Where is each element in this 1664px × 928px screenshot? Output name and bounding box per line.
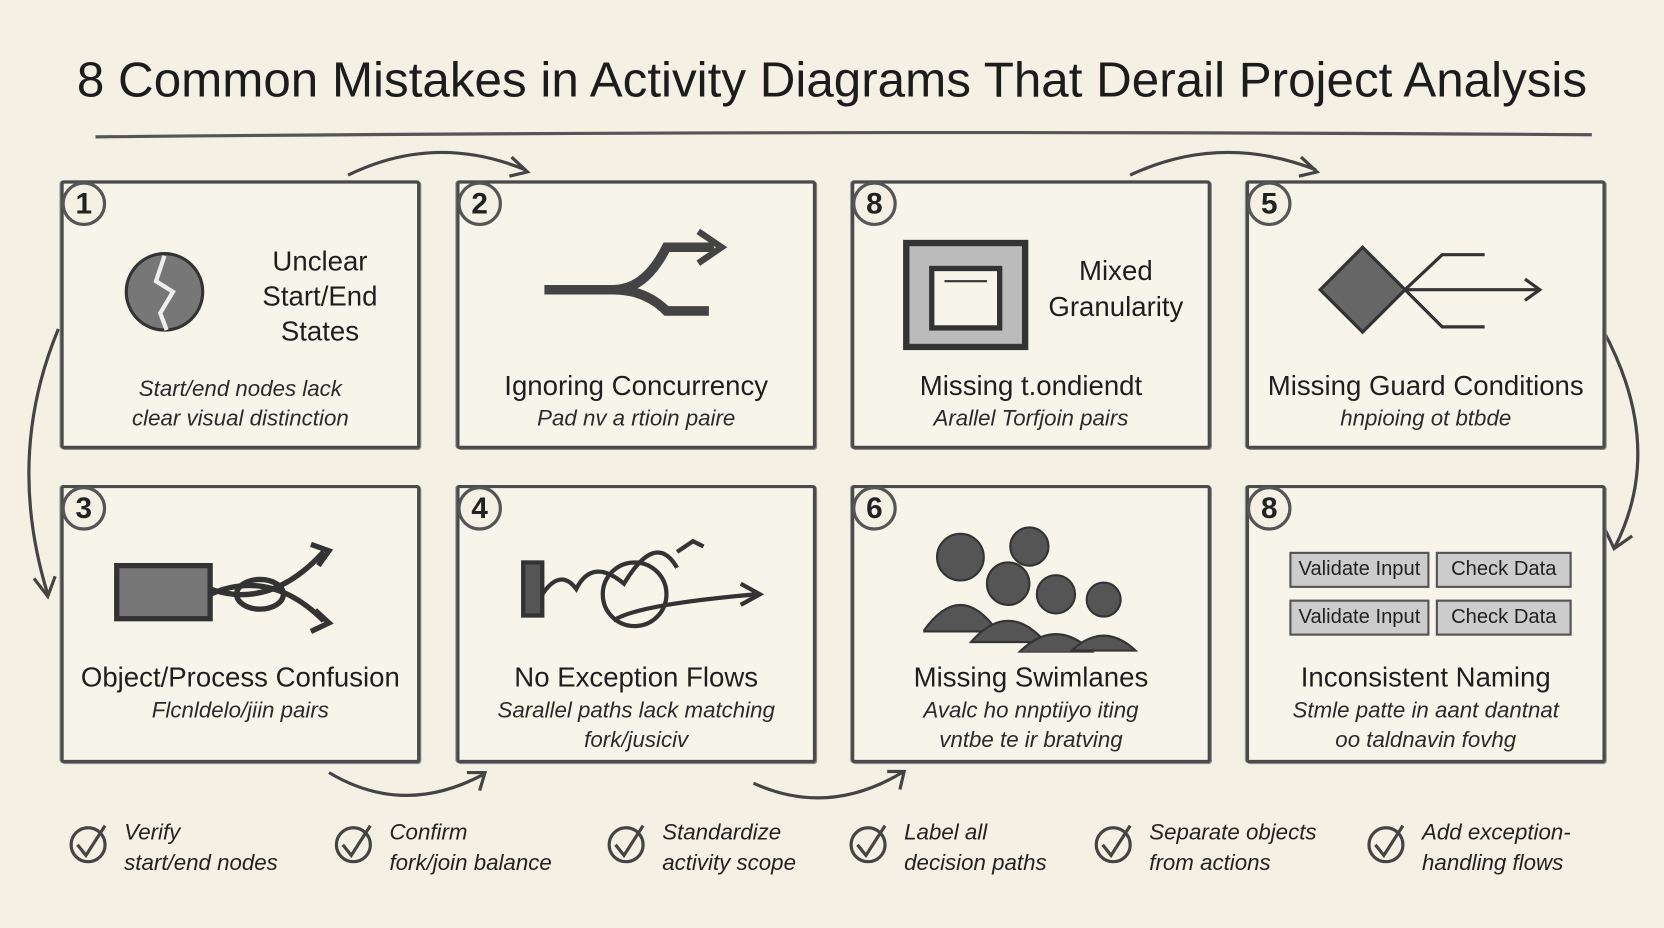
panel: 8: Check Data <box>1451 558 1556 580</box>
panel: 7: Avalc ho nnptiiyo iting <box>923 698 1139 723</box>
checklist: handling flows <box>1422 851 1563 876</box>
panel: 3: Missing t.ondiendt <box>920 369 1142 401</box>
panel: 6 <box>456 485 816 763</box>
panel: 1: Start/end nodes lack <box>139 377 342 401</box>
checklist: Verify <box>124 820 180 845</box>
panel: 3: Mixed <box>1079 255 1153 287</box>
panel: 2 <box>456 180 816 449</box>
checklist <box>70 820 1571 876</box>
panel: 8: Validate Input <box>1299 606 1420 628</box>
checklist: Label all <box>904 820 987 845</box>
panel: 5: Object/Process Confusion <box>81 661 400 693</box>
panel: 2: Pad nv a rtioin paire <box>537 406 735 431</box>
panel: 8: Stmle patte in aant dantnat <box>1293 698 1559 723</box>
icon: fork arrows <box>544 228 728 316</box>
panel: 7: 6 <box>866 491 883 524</box>
panel: 5 <box>60 485 420 763</box>
icon: broken circle <box>124 252 204 332</box>
panel: 7 <box>851 485 1211 763</box>
panel: 4: hnpioing ot btbde <box>1340 406 1511 431</box>
icon: object and arrows <box>114 542 334 634</box>
icon: naming boxes <box>1289 552 1572 636</box>
panel: 7: Missing Swimlanes <box>914 661 1148 693</box>
checklist: Confirm <box>389 820 467 845</box>
panel: 8: Inconsistent Naming <box>1301 661 1551 693</box>
panel: 3: 8 <box>866 187 883 220</box>
panel: 7: vntbe te ir bratving <box>939 728 1123 752</box>
panel: 6: Sarallel paths lack matching <box>497 698 775 723</box>
icon: nested squares <box>903 240 1028 350</box>
checklist: from actions <box>1149 851 1271 876</box>
checklist: start/end nodes <box>124 851 278 876</box>
title: 8 Common Mistakes in Activity Diagrams That Derail Project Analysis <box>77 52 1587 107</box>
checklist: decision paths <box>904 851 1047 876</box>
panel: 3: Granularity <box>1048 291 1183 323</box>
icon: decision diamond <box>1318 245 1542 334</box>
panel: 2: 2 <box>471 187 488 220</box>
panel: 8: Check Data <box>1451 606 1556 628</box>
checklist: activity scope <box>662 851 796 876</box>
panel: 5: 3 <box>76 491 92 524</box>
panel: 3 <box>851 180 1211 449</box>
checklist: Add exception- <box>1422 820 1571 845</box>
panel: 1 <box>60 180 420 449</box>
panel: 5: Flcnldelo/jiin pairs <box>152 698 329 723</box>
panel: 6: 4 <box>471 491 488 524</box>
panel: 8: 8 <box>1261 491 1277 524</box>
panel: 1: clear visual distinction <box>132 406 349 431</box>
panel: 1: States <box>281 315 359 347</box>
panel: 8: oo taldnavin fovhg <box>1335 728 1516 752</box>
panel: 1: Unclear <box>272 245 367 277</box>
icon: people <box>923 526 1138 653</box>
panel: 1: 1 <box>76 187 92 220</box>
panel: 3: Arallel Torfjoin pairs <box>934 406 1128 431</box>
panel: 4: 5 <box>1261 187 1277 220</box>
panel: 4 <box>1246 180 1606 449</box>
checklist: Separate objects <box>1149 820 1317 845</box>
checklist: fork/join balance <box>389 851 552 876</box>
panel: 6: fork/jusiciv <box>584 728 688 752</box>
panel: 4: Missing Guard Conditions <box>1268 369 1584 401</box>
panel: 1: Start/End <box>262 280 377 312</box>
panel: 8 <box>1246 485 1606 763</box>
panel: 8: Validate Input <box>1299 558 1420 580</box>
panel: 6: No Exception Flows <box>514 661 758 693</box>
checklist: Standardize <box>662 820 781 845</box>
icon: exception flow <box>521 538 764 628</box>
panel: 2: Ignoring Concurrency <box>504 369 768 401</box>
